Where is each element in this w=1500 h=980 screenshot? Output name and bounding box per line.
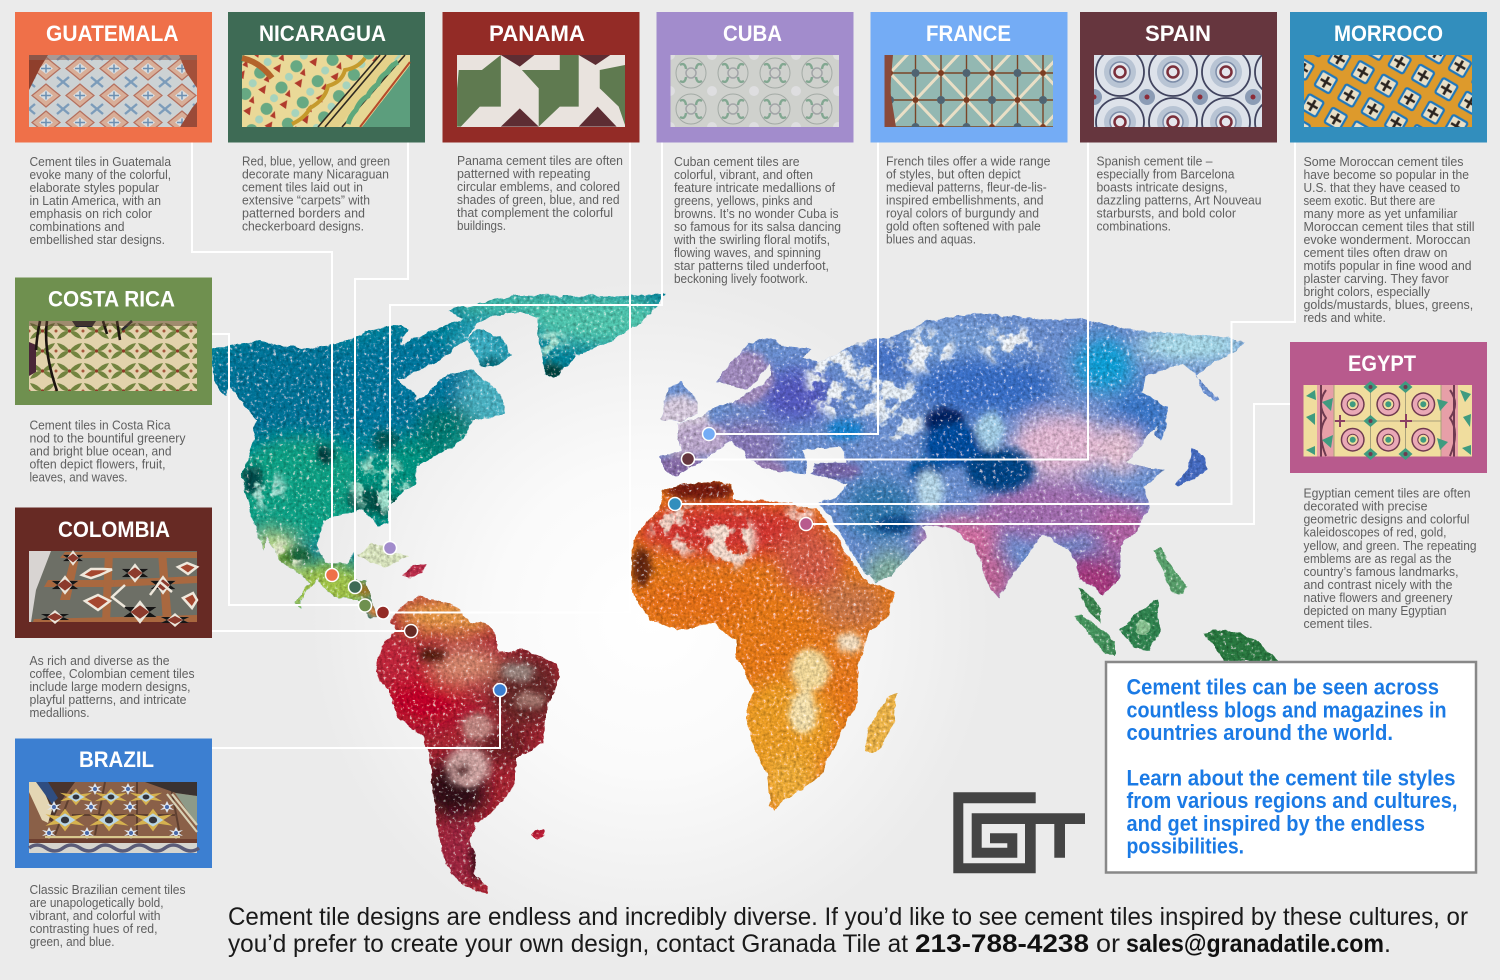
text: spain: starbursts, and bold color [1096,206,1236,220]
callout box: and get inspired by the endless [1126,811,1425,836]
text: morocco: U.S. that they have ceased to [1304,181,1460,195]
panel: morroco [1290,12,1487,142]
text: egypt: depicted on many Egyptian [1304,604,1447,618]
panel: egypt [1290,342,1487,473]
text: morocco: many more as yet unfamiliar [1304,207,1458,221]
text: costa rica: often depict flowers, fruit, [30,458,166,472]
panel: spain [1080,12,1277,142]
text: cuba: so famous for its salsa dancing [674,220,841,234]
callout box: countries around the world. [1126,720,1393,745]
text: guatemala: evoke many of the colorful, [30,168,171,182]
text: spain [1096,154,1262,234]
text: costa rica [30,418,186,484]
closing statement: or [1096,930,1120,958]
text: brazil: Classic Brazilian cement tiles [30,883,186,897]
text: nicaragua: patterned borders and [242,206,365,220]
text: brazil: contrasting hues of red, [30,922,158,936]
text: costa rica: and bright blue ocean, and [30,444,172,458]
text: nicaragua [242,154,390,234]
panel: guatemala [15,12,212,142]
connector lines [192,142,1295,748]
callout box: possibilities. [1126,834,1244,858]
text: guatemala [30,155,171,247]
text: egypt: emblems are as regal as the [1304,552,1452,566]
text: colombia: playful patterns, and intricate [30,693,187,707]
panel: cuba [656,12,854,142]
text: nicaragua: Red, blue, yellow, and green [242,154,390,168]
text: egypt: geometric designs and colorful [1304,512,1470,526]
heading: brazil: BRAZIL [79,747,154,772]
text: costa rica: nod to the bountiful greenery [30,432,186,446]
text: egypt: Egyptian cement tiles are often [1304,486,1471,500]
text: panama: shades of green, blue, and red [457,193,620,207]
text: panama: patterned with repeating [457,167,591,181]
map: south america [376,596,560,894]
photo: france tiles [884,55,1053,127]
panel: nicaragua [228,12,425,142]
text: nicaragua: decorate many Nicaraguan [242,168,389,182]
panel: panama [442,12,640,142]
text: nicaragua: extensive “carpets” with [242,194,370,208]
map: eurasia [659,312,1244,598]
text: cuba: greens, yellows, pinks and [674,194,813,208]
map: japan [1175,448,1207,487]
text: costa rica: leaves, and waves. [30,470,128,484]
text: panama [457,154,623,233]
map: madagascar [865,693,897,753]
text: spain: dazzling patterns, Art Nouveau [1096,194,1262,208]
map: hispaniola [402,563,426,578]
heading: spain: SPAIN [1145,21,1211,46]
closing statement [228,903,1468,958]
text: guatemala: Cement tiles in Guatemala [30,155,171,169]
text: france: royal colors of burgundy and [886,206,1039,220]
text: morocco: seem exotic. But there are [1304,194,1435,208]
text: guatemala: elaborate styles popular [30,181,159,195]
text: cuba: colorful, vibrant, and often [674,168,813,182]
heading: egypt: EGYPT [1348,351,1417,376]
photo: brazil tiles [29,782,199,853]
text: cuba: Cuban cement tiles are [674,155,800,169]
heading: costa rica: COSTA RICA [48,286,175,312]
text: guatemala: in Latin America, with an [30,194,161,208]
text: egypt: yellow, and green. The repeating [1304,539,1477,553]
panel: brazil [15,738,212,868]
text: guatemala: embellished star designs. [30,233,165,247]
text: nicaragua: checkerboard designs. [242,220,364,234]
text: morocco: cement tiles often draw on [1304,246,1448,260]
text: egypt: cement tiles. [1304,617,1372,631]
text: egypt [1304,486,1477,631]
heading: guatemala: GUATEMALA [46,21,179,46]
text: guatemala: combinations and [30,220,125,234]
text: panama: that complement the colorful [457,206,613,220]
heading: panama: PANAMA [489,21,585,46]
text: cuba: with the swirling floral motifs, [673,233,830,247]
text: colombia: As rich and diverse as the [30,654,170,668]
text: egypt: country’s famous landmarks, [1304,565,1458,579]
text: guatemala: emphasis on rich color [30,207,152,221]
text: brazil: are unapologetically bold, [30,896,164,910]
panel: colombia [15,508,212,638]
world map watercolor [200,285,1280,905]
heading: morroco: MORROCO [1334,21,1443,46]
text: france: blues and aquas. [886,232,976,246]
map: falkland [530,828,545,840]
text: morocco: evoke wonderment. Moroccan [1304,233,1471,247]
text: morocco: motifs popular in fine wood and [1304,259,1472,273]
text: spain: combinations. [1096,220,1171,234]
heading: colombia: COLOMBIA [58,517,170,542]
text: egypt: kaleidoscopes of red, gold, [1304,526,1446,540]
text: panama: circular emblems, and colored [457,180,620,194]
panel: france [870,12,1068,142]
text: cuba: browns. It’s no wonder Cuba is [674,207,839,221]
heading: nicaragua: NICARAGUA [259,21,386,46]
text: nicaragua: cement tiles laid out in [242,180,363,194]
panel: costa rica [15,278,212,405]
text: morocco [1304,155,1474,325]
text: morocco: plaster carving. They favor [1304,272,1449,286]
photo: spain tiles [1094,55,1262,127]
heading: cuba: CUBA [723,21,782,46]
text: france: inspired embellishments, and [886,194,1044,208]
photo: panama tiles [457,55,625,127]
text: morocco: bright colors, especially [1304,285,1431,299]
photo: morocco tiles [1304,55,1472,127]
map: north america [212,293,666,619]
closing statement: you’d prefer to create your own design, contact Granada Tile at [228,930,908,958]
text: panama: buildings. [457,219,506,233]
text: costa rica: Cement tiles in Costa Rica [30,418,171,432]
callout box: from various regions and cultures, [1126,788,1458,813]
text: morocco: Some Moroccan cement tiles [1304,155,1464,169]
text: cuba: beckoning lively footwork. [674,272,808,286]
text: morocco: reds and white. [1304,311,1386,325]
text: france: French tiles offer a wide range [886,154,1051,168]
map: southeast asia islands [1074,547,1280,662]
callout box: countless blogs and magazines in [1126,698,1446,722]
text: france [886,154,1051,246]
map: cuba island [358,543,410,567]
closing statement: sales@granadatile.com [1126,930,1384,958]
text: france: medieval patterns, fleur-de-lis- [886,180,1047,194]
photo: nicaragua tiles [242,55,410,127]
text: france: gold often softened with pale [886,220,1041,234]
text: colombia: include large modern designs, [30,680,190,694]
text: cuba [673,155,841,286]
text: france: of styles, but often depict [886,168,1021,182]
closing statement: 213-788-4238 [915,930,1089,958]
text: spain: boasts intricate designs, [1096,180,1228,194]
text: egypt: and contrast nicely with the [1304,578,1453,592]
text: spain: especially from Barcelona [1096,168,1235,182]
callout box: Learn about the cement tile styles [1126,766,1456,790]
photo: costa rica tiles [29,321,197,391]
closing statement: Cement tile designs are endless and incredibly diverse. If you’d like to see cement tiles inspired by these cultures, or [228,903,1468,931]
text: colombia [30,654,194,720]
text: egypt: decorated with precise [1304,500,1428,514]
text: morocco: golds/mustards, blues, greens, [1304,298,1473,312]
logo: GT maze mark [953,792,1085,873]
heading: france: FRANCE [926,21,1011,46]
callout box [1106,662,1476,872]
text: egypt: native flowers and greenery [1304,591,1453,605]
text: brazil [30,883,186,949]
text: morocco: Moroccan cement tiles that still [1304,220,1474,234]
photo: colombia tiles [29,550,197,627]
photo: guatemala tiles [29,55,197,127]
text: cuba: star patterns tiled underfoot, [674,259,829,273]
location dots [326,428,812,696]
photo: cuba tiles [670,55,839,127]
text: colombia: medallions. [30,706,90,720]
text: brazil: green, and blue. [30,935,114,949]
map: africa [631,480,895,810]
text: brazil: vibrant, and colorful with [30,909,161,923]
photo: egypt tiles [1304,381,1472,460]
text: panama: Panama cement tiles are often [457,154,623,168]
text: colombia: coffee, Colombian cement tiles [30,667,194,681]
text: cuba: flowing waves, and spinning [674,246,821,260]
text: cuba: feature intricate medallions of [674,181,836,195]
text: spain: Spanish cement tile – [1096,154,1213,168]
text: morocco: have become so popular in the [1304,168,1469,182]
callout box: Cement tiles can be seen across [1126,674,1439,700]
closing statement: . [1384,930,1391,958]
